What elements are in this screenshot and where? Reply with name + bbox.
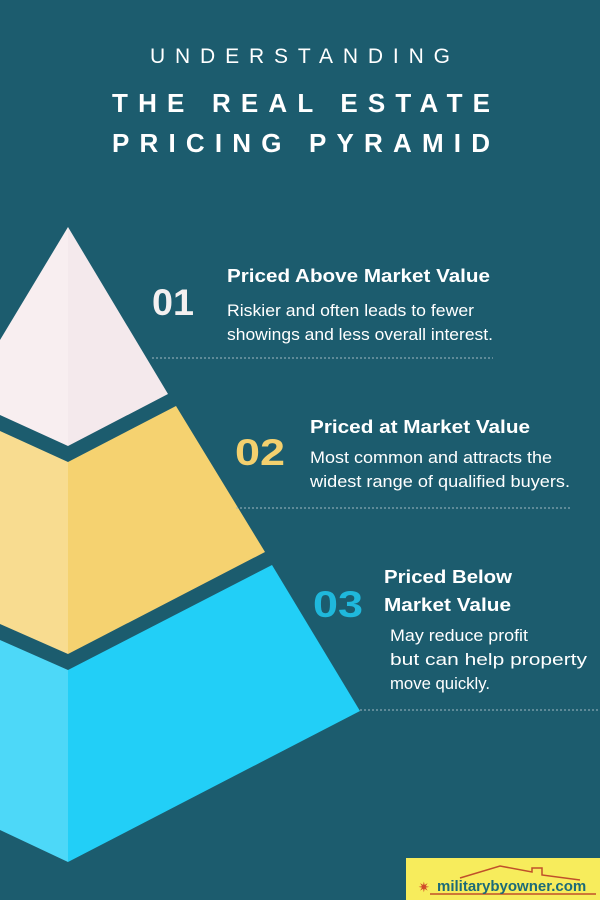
item 01 (152, 266, 493, 344)
item 03: Priced Below (384, 567, 513, 587)
item 03 (313, 567, 588, 693)
title: UNDERSTANDING (150, 45, 450, 68)
item 01: 01 (152, 282, 194, 323)
item 03: but can help property (390, 650, 588, 669)
logo: ✷ (418, 879, 430, 895)
item 03: move quickly. (390, 674, 490, 693)
item 03: Market Value (384, 595, 511, 615)
tier 2: middle (0, 406, 265, 654)
item 01: Priced Above Market Value (227, 266, 490, 286)
item 02: 02 (235, 432, 285, 473)
item 02: Most common and attracts the (310, 448, 552, 467)
title: THE REAL ESTATE (112, 88, 490, 118)
item 02: widest range of qualified buyers. (309, 472, 570, 491)
title (112, 45, 490, 158)
item 03: May reduce profit (390, 626, 528, 645)
pyramid (0, 227, 360, 862)
logo: militarybyowner.com (437, 878, 586, 895)
tier 3: bottom (0, 565, 360, 862)
item 01: showings and less overall interest. (227, 325, 493, 344)
dividers (152, 358, 600, 710)
logo (406, 858, 600, 900)
item 02 (235, 417, 570, 491)
tier 1: top (0, 227, 168, 446)
title: PRICING PYRAMID (112, 128, 490, 158)
item 01: Riskier and often leads to fewer (227, 301, 474, 320)
item 02: Priced at Market Value (310, 417, 530, 437)
item 03: 03 (313, 584, 363, 625)
